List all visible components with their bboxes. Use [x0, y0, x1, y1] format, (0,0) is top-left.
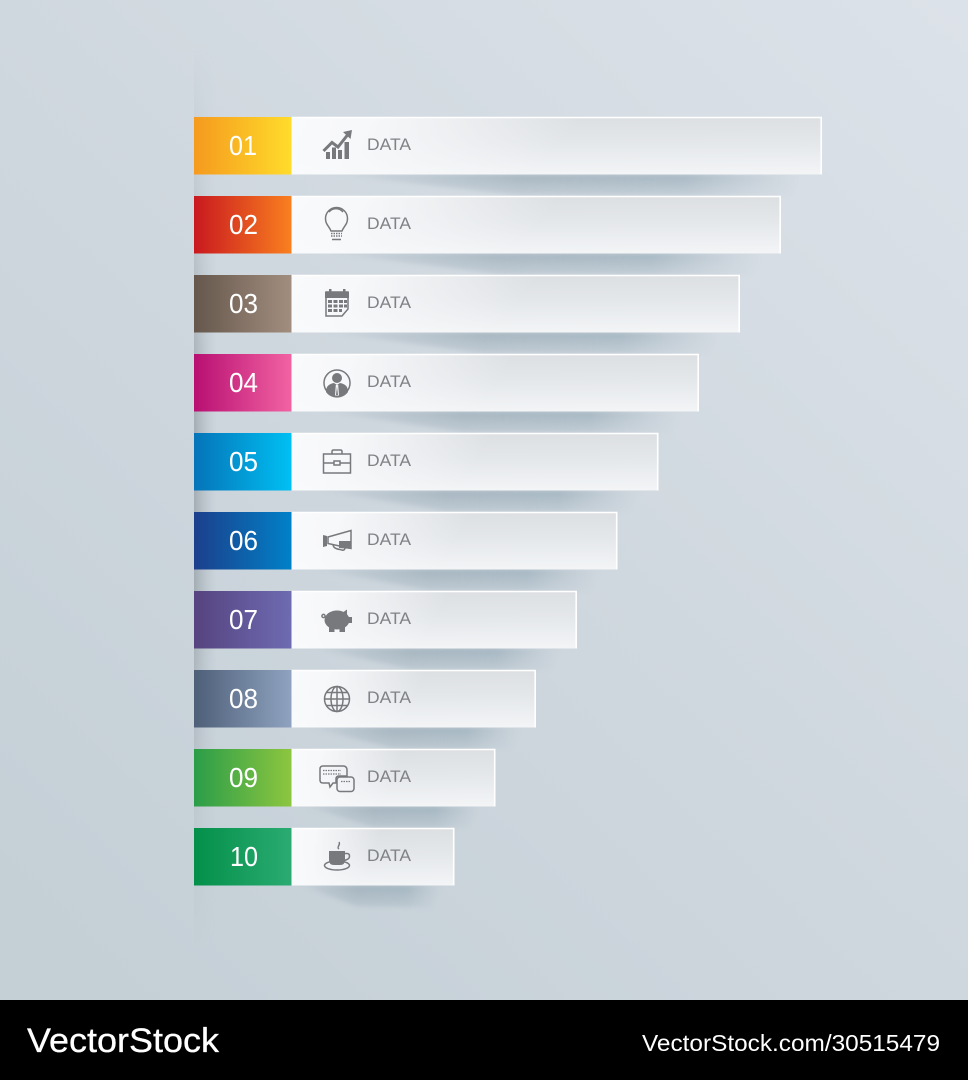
row 07: 07 — [229, 604, 258, 635]
row 08: DATA — [367, 689, 411, 707]
vertical fold shadow — [194, 174, 210, 824]
row 04 — [194, 354, 699, 434]
row 10: 10 — [230, 841, 258, 872]
watermark bar — [0, 1000, 968, 1080]
row 01: 01 — [229, 130, 257, 161]
row 05: 05 — [229, 446, 258, 477]
row 07: DATA — [367, 610, 411, 628]
icon: calendar — [325, 289, 349, 316]
row 09: DATA — [367, 768, 411, 786]
icon: light bulb — [326, 208, 348, 240]
row 04: 04 — [229, 367, 258, 398]
row 04: DATA — [367, 373, 411, 391]
row 08 — [194, 670, 536, 750]
row 07 — [194, 591, 577, 671]
row 08: 08 — [229, 683, 258, 714]
row 01 — [194, 117, 822, 197]
row 06: DATA — [367, 531, 411, 549]
watermark logo text: VectorStock — [27, 1022, 220, 1060]
row 06 — [194, 512, 618, 592]
icon: chat bubbles — [320, 766, 354, 792]
row 10 — [194, 828, 454, 908]
row 09 — [194, 749, 496, 829]
row 09: 09 — [229, 762, 258, 793]
row 03 — [194, 275, 740, 355]
row 02: 02 — [229, 209, 258, 240]
row 02: DATA — [367, 215, 411, 233]
row 06: 06 — [229, 525, 258, 556]
row 05: DATA — [367, 452, 411, 470]
icon: megaphone — [323, 530, 351, 550]
row 01: DATA — [367, 136, 411, 154]
watermark id text: VectorStock.com/30515479 — [642, 1030, 940, 1056]
icon: globe — [324, 686, 350, 712]
row 03: 03 — [229, 288, 258, 319]
icon: rising chart — [324, 130, 352, 159]
row 10: DATA — [367, 847, 411, 865]
icon: person in circle — [324, 370, 350, 398]
icon: piggy bank — [322, 610, 352, 632]
icon: briefcase — [324, 450, 350, 473]
row 02 — [194, 196, 781, 276]
row 03: DATA — [367, 294, 411, 312]
row 05 — [194, 433, 658, 513]
icon: coffee cup — [324, 842, 350, 870]
